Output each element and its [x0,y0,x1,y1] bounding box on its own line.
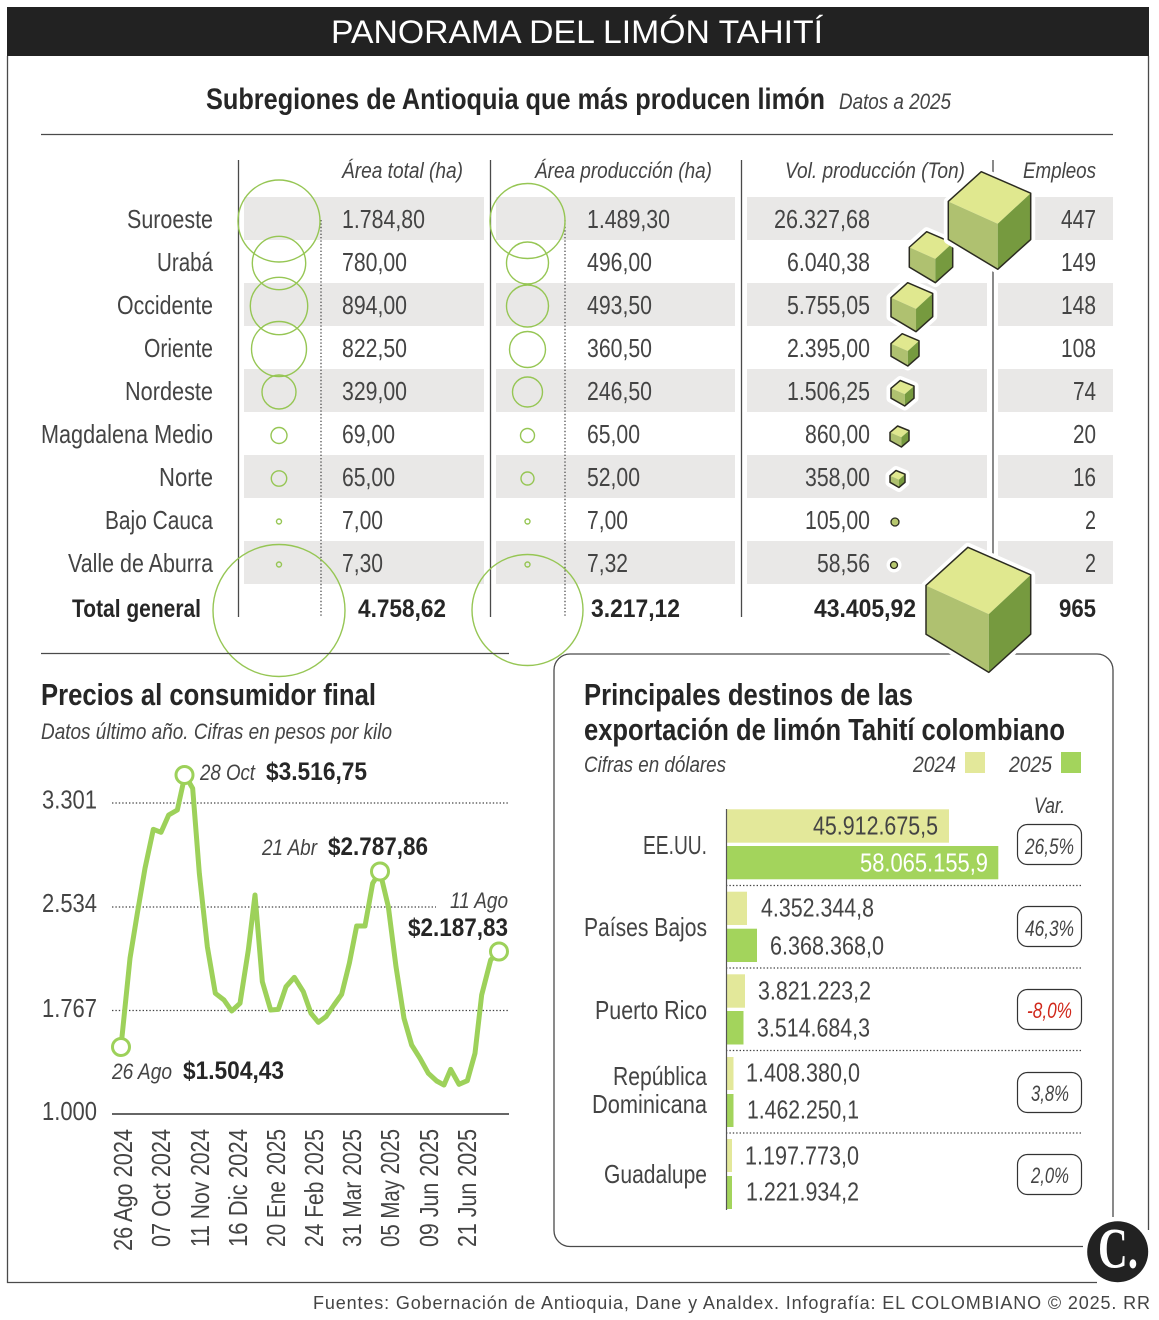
values: área producción: 360,50 [587,333,652,363]
line chart: precios [42,758,509,1251]
values: área total: 894,00 [342,290,407,320]
y axis labels: 3.301 [42,784,97,814]
column headers [341,158,1096,183]
values: volumen producción: 1.506,25 [787,376,870,406]
values: empleos [1061,204,1096,578]
values: volumen producción: 58,56 [817,548,870,578]
bars [726,809,998,1210]
totals row: 4.758,62 [358,595,446,623]
values: área producción: 246,50 [587,376,652,406]
cube: Magdalena Medio [890,426,909,447]
subregion labels [41,204,213,578]
cube: Valle de Aburra [886,558,902,572]
values: área producción: 7,32 [587,548,628,578]
y axis labels: 1.000 [42,1096,97,1126]
column headers: Área producción (ha) [534,158,712,183]
heading: destinos [584,677,1065,747]
values: área producción: 52,00 [587,462,640,492]
x axis labels: 11 Nov 2024 [185,1129,215,1247]
callouts [111,758,508,1085]
values: área total: 7,00 [342,505,383,535]
values: empleos: 148 [1061,290,1096,320]
x axis labels: 05 May 2025 [375,1129,405,1247]
callouts: $2.187,83 [408,914,508,942]
callouts: $3.516,75 [266,758,367,786]
totals row: Total general [72,595,201,623]
totals row [72,595,1096,623]
country labels: Puerto Rico [595,995,707,1025]
subregion labels: Magdalena Medio [41,419,213,449]
subheading: precios: Datos último año. Cifras en pesos por kilo [41,719,392,744]
country labels: Guadalupe [604,1159,707,1189]
variation badges: 26,5% [1024,834,1074,859]
values: empleos: 149 [1061,247,1096,277]
country labels [584,830,707,1189]
values: área producción: 7,00 [587,505,628,535]
values: empleos: 2 [1085,548,1096,578]
values: área total: 1.784,80 [342,204,425,234]
x axis labels: 31 Mar 2025 [337,1129,367,1247]
logo: El Colombiano: C. [1098,1218,1138,1280]
y axis labels [42,784,97,1126]
values: empleos: 447 [1061,204,1096,234]
x axis labels: 21 Jun 2025 [452,1129,482,1247]
callouts: 26 Ago [111,1059,172,1084]
title bar: PANORAMA DEL LIMÓN TAHITÍ [331,14,823,50]
values: área producción: 493,50 [587,290,652,320]
bubbles: área producción [472,184,583,666]
x axis labels [108,1129,482,1251]
cube: Nordeste [891,380,914,406]
country labels: EE.UU. [643,830,707,860]
bar values: 1.197.773,0 [745,1140,859,1170]
bar values: 1.408.380,0 [746,1058,860,1088]
values: empleos: 108 [1061,333,1096,363]
heading: subregiones: Subregiones de Antioquia que más producen limón [206,83,825,116]
column headers: Vol. producción (Ton) [785,158,965,183]
callouts: $2.787,86 [328,833,428,861]
column headers: Área total (ha) [341,158,463,183]
subregion labels: Bajo Cauca [105,505,213,535]
heading: subregiones: Datos a 2025 [839,89,952,114]
values: volumen producción: 2.395,00 [787,333,870,363]
callouts: 21 Abr [261,835,318,860]
subheading: destinos: Cifras en dólares [584,752,726,777]
subregion labels: Valle de Aburra [68,548,213,578]
heading: destinos: exportación de limón Tahití colombiano [584,712,1065,747]
values: área producción [587,204,670,578]
legend: 2025 [1008,752,1053,777]
values: área total: 780,00 [342,247,407,277]
markers [112,766,508,1056]
callouts: 28 Oct [199,760,256,785]
cube: Suroeste [948,172,1031,269]
subregion labels: Suroeste [127,204,213,234]
variation badges [1018,793,1082,1194]
values: volumen producción: 105,00 [805,505,870,535]
price line [121,775,499,1085]
heading: precios: Precios al consumidor final [41,677,376,712]
callouts: 11 Ago [450,888,508,913]
subregion labels: Oriente [144,333,213,363]
x axis labels: 24 Feb 2025 [299,1129,329,1247]
totals row: 43.405,92 [814,595,916,623]
bar chart: destinos [584,793,1082,1210]
panel: production table [41,158,1113,676]
legend: 2024 [912,752,956,777]
totals row: 3.217,12 [591,595,680,623]
values: área total: 822,50 [342,333,407,363]
country labels: República [613,1061,707,1091]
values: volumen producción: 5.755,05 [787,290,870,320]
values: volumen producción [774,204,870,578]
values: área total: 65,00 [342,462,395,492]
bar values: 1.462.250,1 [747,1094,859,1124]
heading: destinos: Principales destinos de las [584,677,913,712]
values: área producción: 65,00 [587,419,640,449]
bar values: 1.221.934,2 [746,1176,859,1206]
values: empleos: 16 [1073,462,1096,492]
legend [912,752,1081,777]
values: empleos: 20 [1073,419,1096,449]
cube: total [926,547,1031,672]
column headers: Empleos [1023,158,1096,183]
variation badges: 46,3% [1025,916,1074,941]
values: volumen producción: 6.040,38 [787,247,870,277]
values: área producción: 1.489,30 [587,204,670,234]
values: volumen producción: 358,00 [805,462,870,492]
values: volumen producción: 26.327,68 [774,204,870,234]
variation badges: 2,0% [1030,1163,1069,1188]
x axis labels: 26 Ago 2024 [108,1129,138,1251]
callouts: $1.504,43 [183,1057,284,1085]
subregion labels: Occidente [117,290,213,320]
y axis labels: 1.767 [42,993,97,1023]
cube: Oriente [891,334,919,366]
x axis labels: 20 Ene 2025 [261,1129,291,1247]
subregion labels: Nordeste [125,376,213,406]
cube: Norte [890,470,905,487]
title bar [7,7,1149,56]
bar values [745,810,988,1206]
variation badges: 3,8% [1031,1081,1069,1106]
bubbles: área total [213,180,345,676]
bar values: 6.368.368,0 [770,930,884,960]
x axis labels: 16 Dic 2024 [223,1129,253,1247]
subregion labels: Urabá [157,247,213,277]
country labels: Países Bajos [584,912,707,942]
bar values: 45.912.675,5 [813,810,938,840]
cube: Occidente [891,283,933,332]
x axis labels: 09 Jun 2025 [414,1129,444,1247]
cube: Urabá [909,232,953,283]
values: área total: 69,00 [342,419,395,449]
variation badges: Var. [1034,793,1065,818]
bar values: 3.821.223,2 [758,976,871,1006]
values: área producción: 496,00 [587,247,652,277]
cube: Bajo Cauca [888,514,902,530]
values: área total: 7,30 [342,548,383,578]
panel: export destinations box [554,654,1113,1246]
country labels: Dominicana [592,1089,707,1119]
source note: Fuentes: Gobernación de Antioquia, Dane y Analdex. Infografía: EL COLOMBIANO © 2025. RR [313,1293,1150,1313]
bar values: 4.352.344,8 [761,892,874,922]
values: volumen producción: 860,00 [805,419,870,449]
totals row: 965 [1059,595,1096,623]
y axis labels: 2.534 [42,888,97,918]
values: empleos: 74 [1073,376,1096,406]
subregion labels: Norte [159,462,213,492]
variation badges: -8,0% [1027,998,1072,1023]
bar values: 58.065.155,9 [860,848,988,878]
values: empleos: 2 [1085,505,1096,535]
values: área total: 329,00 [342,376,407,406]
values: área total [342,204,425,578]
x axis labels: 07 Oct 2024 [146,1129,176,1247]
bar values: 3.514.684,3 [757,1012,870,1042]
